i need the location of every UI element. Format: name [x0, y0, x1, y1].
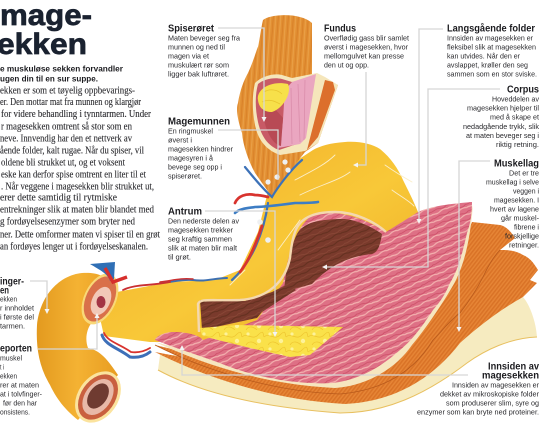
duodenum lower opening — [66, 363, 130, 431]
intro body text: r magesekken omtrent så stor som en — [1, 122, 132, 132]
label: Portvakten / porten: muskel — [0, 354, 22, 362]
intro body text: entrekninger slik at maten blir blandet med — [0, 204, 154, 216]
label: Fundus: Overflødig gass blir samlet — [324, 34, 410, 42]
label: Muskellag: fibrene i — [514, 222, 539, 232]
pointer: Innsiden — [182, 349, 468, 375]
label: Tolvfingertarmen — [0, 276, 35, 330]
intro body text: ekken er som et tøyelig oppbevarings- — [0, 86, 135, 96]
label: Langsgående folder: Innsiden av magesekken er — [447, 34, 533, 42]
intro body text: . Når veggene i magesekken blir strukket ut, — [1, 182, 154, 192]
label: Magemunnen: bevege seg opp i — [168, 162, 222, 172]
label: Antrum: Antrum — [168, 206, 202, 218]
blood vessels — [102, 155, 414, 357]
label: Corpus: Corpus — [507, 84, 539, 96]
label: Tolvfingertarmen: tarmen. — [0, 322, 25, 330]
label: Muskellag: hvert av lagene — [490, 204, 539, 214]
label: Fundus: Fundus — [324, 24, 356, 34]
label: Portvakten / porten: ekken — [0, 372, 17, 380]
title — [0, 0, 92, 61]
label: Spiserøret: Maten beveger seg fra — [168, 34, 241, 42]
label: Spiserøret — [168, 24, 241, 78]
label: Spiserøret: muskulært rør som — [168, 60, 229, 70]
label: Tolvfingertarmen: en — [0, 286, 9, 296]
label: Fundus: den ut og opp. — [324, 60, 369, 70]
label: Magemunnen: øverst i — [168, 136, 192, 144]
label: Antrum: Den nederste delen av — [168, 216, 239, 226]
pointer: Tolvfingertarmen — [30, 281, 47, 310]
label: Innsiden av magesekken: Innsiden av magesekken er — [452, 380, 539, 390]
pointer: Porten — [38, 317, 97, 349]
arrowheads — [44, 117, 462, 350]
pointer: Muskellag — [459, 161, 490, 328]
pointer lines — [30, 28, 500, 375]
label: Magemunnen: magesekken hindrer — [168, 144, 233, 154]
label: Portvakten / porten: at i tolvfinger- — [0, 390, 42, 398]
pointer: Corpus — [326, 89, 500, 267]
intro body text: oldene bli strukket ut, og et voksent — [1, 158, 125, 168]
stomach outer wall and fundus — [100, 142, 418, 342]
label: Muskellag: Det er tre — [509, 168, 539, 178]
label: Portvakten / porten — [0, 344, 42, 416]
label: Antrum: til grøt. — [168, 252, 191, 262]
label: Spiserøret: magen via et — [168, 52, 210, 60]
intro body text: g fordøyelsesenzymer som bryter ned — [0, 216, 135, 228]
label: Magemunnen — [168, 116, 233, 180]
label: Portvakten / porten: eporten — [0, 344, 32, 354]
label: Tolvfingertarmen: inger- — [0, 276, 24, 288]
label: Muskellag — [486, 158, 539, 250]
intro body text: an fordøyes lenger ut i fordøyelseskanalen. — [0, 242, 148, 252]
label: Innsiden av magesekken: magesekken — [482, 370, 539, 382]
intro body text: ående folder, kalt rugae. Når du spiser, vil — [0, 146, 144, 156]
label: Tolvfingertarmen: r innholdet — [0, 304, 35, 312]
pointer: Antrum — [205, 211, 275, 333]
label: Tolvfingertarmen: i første del — [0, 312, 34, 322]
dark inner shadow — [284, 219, 382, 292]
label: Corpus: at maten beveger seg i — [466, 131, 539, 140]
label: Antrum: magesekken trekker — [168, 226, 233, 234]
pointer: Langsgående folder — [419, 29, 443, 220]
intro body text: er. Den mottar mat fra munnen og klargjør — [0, 97, 142, 108]
label: Langsgående folder: fleksibel slik at magesekken — [447, 42, 536, 52]
label: Magemunnen: spiserøret. — [168, 172, 202, 180]
label: Magemunnen: Magemunnen — [168, 116, 230, 128]
label: Fundus: øverst i magesekken, hvor — [324, 42, 408, 52]
label: Portvakten / porten: før den har — [3, 398, 37, 408]
label: Corpus: med å skape et — [490, 112, 540, 122]
label: Muskellag: retninger. — [509, 240, 539, 250]
label: Fundus: mellomgulvet kan presse — [324, 52, 404, 60]
label: Muskellag: muskellag i selve — [486, 178, 539, 186]
label: Corpus: magesekken hjelper til — [467, 104, 539, 112]
label: Innsiden av magesekken: enzymer som kan bryte ned proteiner. — [417, 408, 539, 416]
esophagus cut section — [253, 73, 338, 155]
food in stomach — [200, 325, 343, 357]
pointer: Fundus — [357, 72, 366, 165]
intro lede: e muskuløse sekken forvandler — [0, 64, 123, 74]
label: Innsiden av magesekken: Innsiden av — [488, 362, 539, 372]
intro body text — [0, 86, 160, 252]
label: Innsiden av magesekken — [417, 362, 539, 416]
aorta vessels — [90, 262, 127, 282]
intro body text: eske kan derfor spise omtrent en liter til et — [1, 170, 146, 180]
duodenum upper opening — [74, 268, 126, 330]
label: Innsiden av magesekken: som produserer slim, syre og — [446, 398, 539, 408]
intro lede — [0, 64, 123, 84]
label: Antrum — [168, 206, 239, 262]
label: Tolvfingertarmen: ekken — [0, 294, 17, 304]
label: Corpus: riktig retning. — [496, 140, 539, 149]
intro lede: ugen din til en sur suppe. — [0, 74, 98, 84]
label: Fundus — [324, 24, 410, 70]
label: Magemunnen: magesyren i å — [168, 154, 214, 162]
label: Langsgående folder: avslappet, krøller den seg — [447, 60, 528, 70]
muscle layers — [155, 205, 538, 413]
label: Antrum: slik at maten blir malt — [168, 244, 238, 252]
label: Langsgående folder — [447, 22, 537, 78]
left chamber shadow — [200, 284, 296, 330]
stomach opening rim — [198, 212, 386, 332]
stomach inner lining — [155, 202, 472, 383]
label: Portvakten / porten: rer at maten — [0, 380, 39, 390]
label: Langsgående folder: sammen som en stor sviske. — [447, 70, 537, 78]
pointer: Magemunnen — [218, 130, 278, 180]
intro body text: erer dette samtidig til rytmiske — [0, 192, 118, 204]
label: Corpus: Hoveddelen av — [492, 94, 539, 104]
label: Corpus: nedadgående trykk, slik — [463, 122, 539, 131]
label: Corpus — [463, 84, 540, 149]
esophagus tube — [237, 15, 338, 197]
label: Spiserøret: ligger bak luftrøret. — [168, 70, 229, 78]
label: Muskellag: Muskellag — [494, 158, 539, 170]
label: Langsgående folder: kan utvides. Når den er — [447, 52, 520, 60]
label: Spiserøret: Spiserøret — [168, 24, 215, 34]
label: Muskellag: magesekken. I — [494, 196, 539, 204]
label: Antrum: seg kraftig sammen — [168, 234, 232, 244]
label: Muskellag: forskjellige — [505, 232, 539, 240]
intro body text: neve. Innvendig har den et nettverk av — [0, 134, 132, 144]
label: Portvakten / porten: t i — [0, 362, 4, 372]
pointer: Spiserøret — [218, 28, 264, 118]
duodenum tube — [37, 273, 118, 420]
label: Langsgående folder: Langsgående folder — [447, 22, 535, 34]
label: Muskellag: går muskel- — [501, 214, 539, 222]
label: Portvakten / porten: onsistens. — [0, 408, 30, 416]
label: Innsiden av magesekken: dekket av mikroskopiske folder — [440, 390, 539, 398]
label: Magemunnen: En ringmuskel — [168, 126, 213, 136]
intro body text: ner. Dette omformer maten vi spiser til en grøt — [0, 230, 160, 240]
label: Spiserøret: munnen og ned til — [168, 42, 225, 52]
intro body text: for videre behandling i tynntarmen. Under — [1, 109, 152, 120]
label: Muskellag: veggen i — [513, 186, 539, 196]
